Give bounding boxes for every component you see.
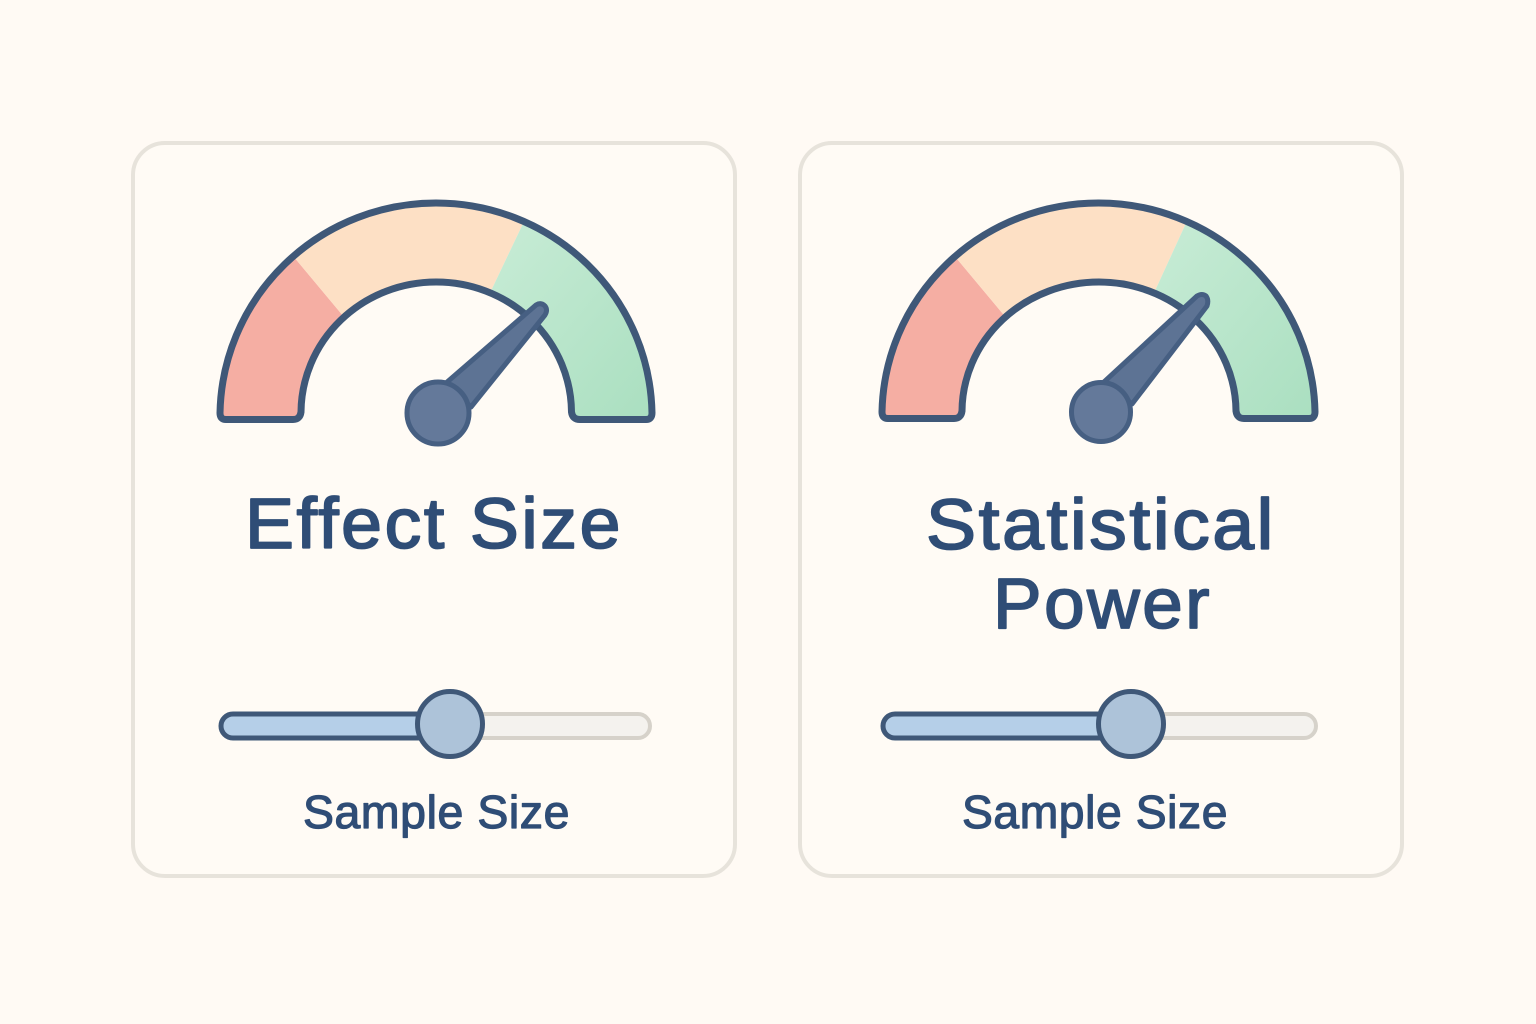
heading line 1: Statistical	[926, 486, 1276, 565]
heading: effect size: Effect Size	[245, 485, 623, 564]
heading line 2: Power	[993, 565, 1212, 644]
slider filled track	[883, 714, 1131, 738]
gauge red zone	[220, 256, 344, 419]
slider: sample size	[221, 692, 650, 756]
needle hub	[407, 382, 469, 444]
gauge green zone	[1154, 221, 1315, 418]
panel background	[133, 143, 735, 876]
gauge orange zone	[955, 203, 1187, 317]
gauge orange zone	[294, 203, 524, 317]
slider knob	[1098, 692, 1164, 756]
panel: statistical power	[800, 143, 1402, 876]
gauge needle	[407, 304, 546, 444]
gauge: effect size	[220, 203, 652, 444]
gauge outline	[220, 203, 652, 420]
gauge needle	[1072, 294, 1208, 442]
needle hub	[1072, 382, 1130, 442]
panel background	[800, 143, 1402, 876]
slider empty track	[221, 714, 650, 738]
label: sample size: Sample Size	[303, 786, 570, 838]
needle pointer	[446, 304, 546, 407]
gauge: statistical power	[882, 203, 1315, 442]
gauge green zone	[490, 222, 652, 419]
needle pointer	[1104, 294, 1208, 404]
label: sample size: Sample Size	[962, 786, 1228, 838]
slider empty track	[883, 714, 1316, 738]
slider filled track	[221, 714, 450, 738]
slider knob	[418, 692, 482, 756]
gauge outline	[882, 203, 1315, 418]
slider: sample size	[883, 692, 1316, 756]
panel: effect size	[133, 143, 735, 876]
gauge red zone	[882, 256, 1006, 418]
heading: statistical power	[926, 486, 1276, 644]
